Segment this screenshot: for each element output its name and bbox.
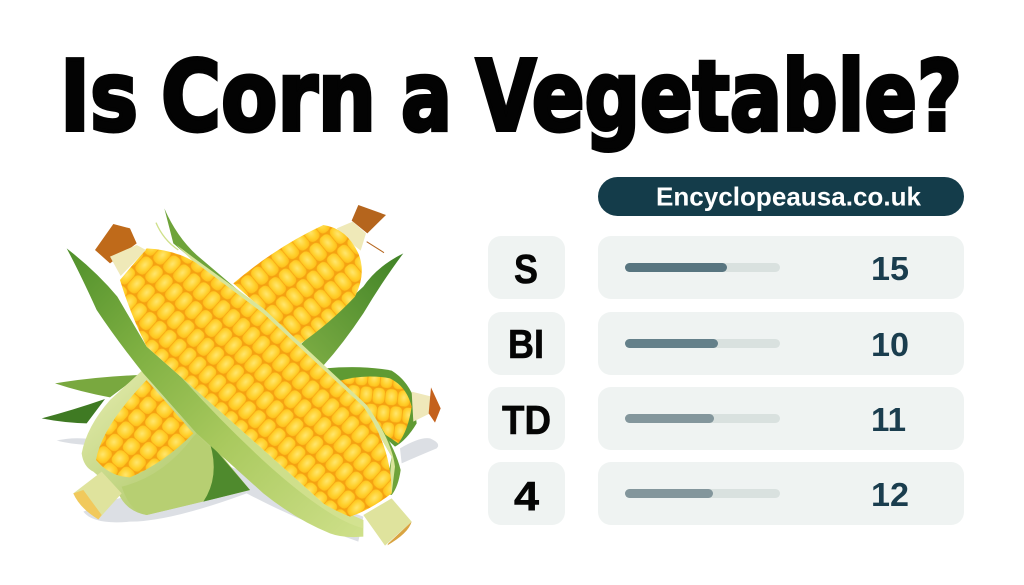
lower cob, right end bbox=[323, 367, 441, 447]
row: BI value bbox=[598, 312, 964, 375]
lower cob, left end bbox=[42, 369, 250, 519]
row: TD value bbox=[598, 387, 964, 450]
label: 4 bbox=[488, 462, 565, 525]
row: S value bbox=[598, 236, 964, 299]
title bbox=[60, 40, 962, 153]
label: 4: 4 bbox=[514, 473, 539, 519]
label: S bbox=[488, 236, 565, 299]
title: Is bbox=[60, 40, 138, 153]
label: BI: BI bbox=[508, 321, 544, 367]
label: TD: TD bbox=[502, 397, 551, 443]
row: TD value: 11 bbox=[871, 401, 906, 438]
row: 4 value: 12 bbox=[871, 476, 909, 513]
ground shadow bbox=[57, 438, 438, 542]
title: Corn bbox=[161, 40, 376, 153]
header pill: Encyclopeausa.co.uk bbox=[656, 182, 922, 212]
header pill bbox=[598, 177, 964, 216]
illustration: corn cobs bbox=[42, 205, 441, 546]
label: S: S bbox=[514, 246, 538, 292]
row: S value: 15 bbox=[871, 250, 909, 287]
back cob, upper right bbox=[233, 205, 403, 366]
title: a bbox=[401, 40, 452, 153]
row: 4 value bbox=[598, 462, 964, 525]
label: BI bbox=[488, 312, 565, 375]
label: TD bbox=[488, 387, 565, 450]
front cob, husk and kernels bbox=[67, 208, 412, 546]
row: BI value: 10 bbox=[871, 326, 909, 363]
